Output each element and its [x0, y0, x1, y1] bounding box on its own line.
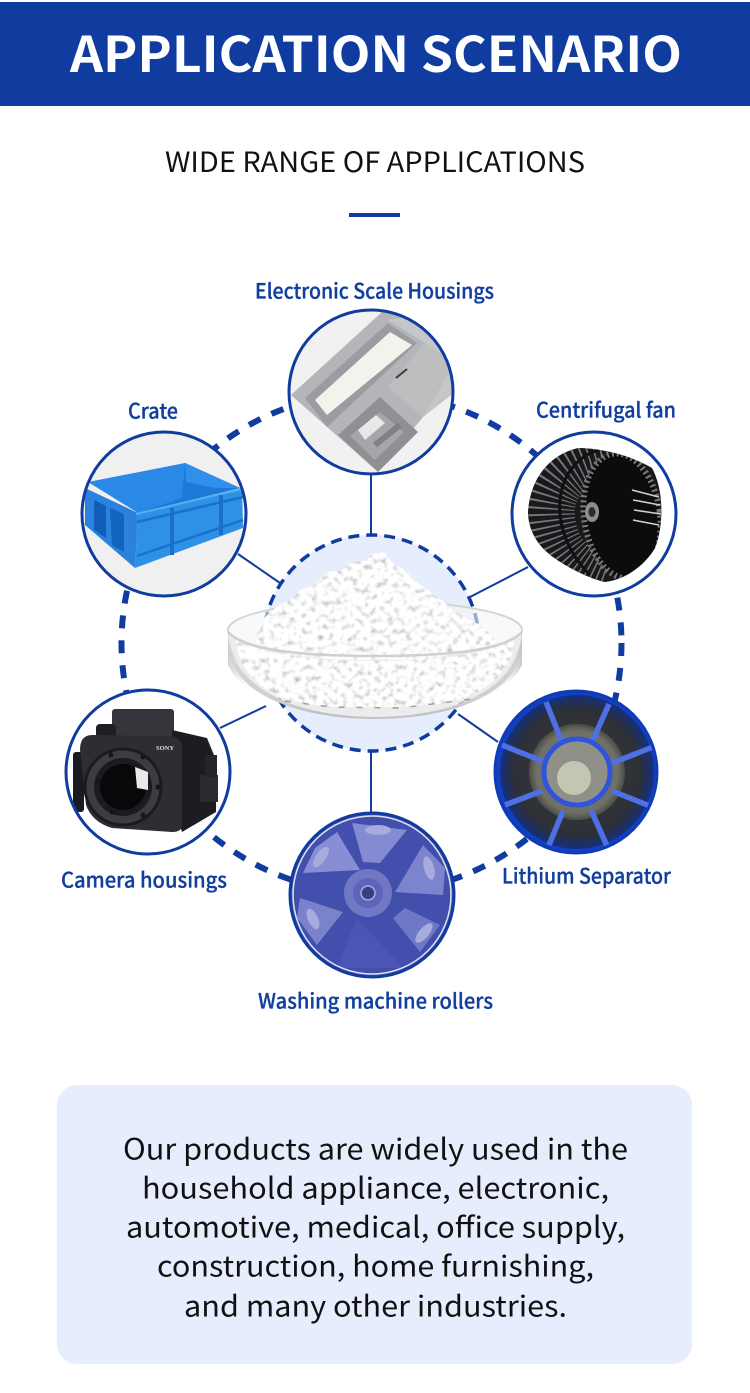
- central material illustration: [228, 535, 522, 751]
- label: camera housings: Camera housings: [61, 864, 227, 894]
- dark grain shadows: [285, 698, 480, 708]
- dish walls and rim: [228, 632, 522, 719]
- description text: automotive, medical, office supply,: [126, 1204, 625, 1246]
- description text: construction, home furnishing,: [157, 1244, 594, 1286]
- brand text: SONY: [156, 745, 174, 752]
- subtitle underline: [349, 213, 400, 217]
- panel: industries description: [57, 1085, 692, 1364]
- central dashed circle: [263, 535, 479, 751]
- icon: electronic scale housing: [289, 308, 460, 474]
- description text: household appliance, electronic,: [142, 1166, 609, 1208]
- icon: lithium separator: [494, 690, 658, 854]
- pellets in dish: [236, 640, 514, 707]
- description text: and many other industries.: [184, 1284, 567, 1326]
- icon: blue crate: [82, 432, 246, 596]
- dish back rim: [228, 601, 522, 659]
- description text: Our products are widely used in the: [123, 1126, 628, 1168]
- label: crate: Crate: [128, 396, 178, 426]
- icon: camera housing: [66, 690, 230, 854]
- icon: washing machine roller: [290, 813, 454, 977]
- label: lithium separator: Lithium Separator: [502, 860, 671, 890]
- label: washing machine rollers: Washing machine rollers: [258, 986, 493, 1016]
- description text: [123, 1126, 628, 1326]
- title: APPLICATION SCENARIO: [69, 16, 682, 87]
- label: centrifugal fan: Centrifugal fan: [536, 394, 676, 424]
- header banner: [0, 2, 750, 106]
- label: electronic scale housings: Electronic Scale Housings: [255, 276, 494, 306]
- connector lines: [220, 470, 528, 815]
- dish body: [228, 632, 522, 716]
- dashed orbit ring: [122, 393, 622, 893]
- icon: centrifugal fan: [512, 432, 676, 596]
- pellet heap: [256, 552, 498, 660]
- subtitle: WIDE RANGE OF APPLICATIONS: [165, 141, 585, 181]
